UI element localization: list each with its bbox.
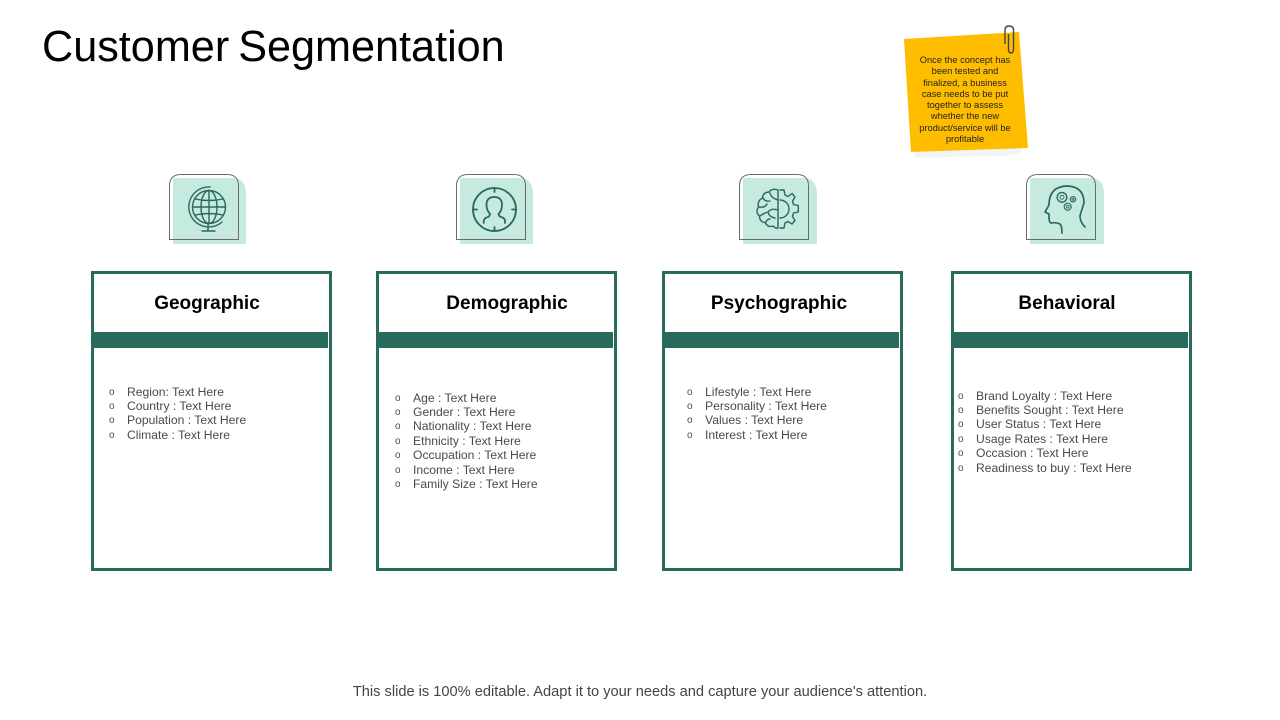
header band [379,332,613,348]
list: psychographic [687,385,827,442]
panel: psychographic [662,271,903,571]
heading: behavioral: Behavioral [1018,293,1116,314]
list: behavioral: o [958,391,964,402]
list: behavioral: Brand Loyalty : Text Here [976,389,1112,403]
note text [919,55,1011,144]
list: demographic [395,391,538,491]
list: demographic: o [395,479,401,490]
list: demographic: Gender : Text Here [413,405,515,419]
icon: paperclip [1004,25,1014,54]
list: psychographic: Personality : Text Here [705,399,827,413]
list: behavioral [958,389,1132,475]
list: demographic: Ethnicity : Text Here [413,434,521,448]
list: behavioral: o [958,419,964,430]
list: geographic: o [109,415,115,426]
list: behavioral: o [958,405,964,416]
icon tile: globe [169,174,246,244]
list: demographic: o [395,421,401,432]
panel: geographic [91,271,332,571]
note text: product/service will be [919,123,1011,133]
note text: case needs to be put [922,89,1008,99]
note text: Once the concept has [920,55,1010,65]
list: behavioral: Occasion : Text Here [976,446,1088,460]
note text: whether the new [931,111,999,121]
list: demographic: Occupation : Text Here [413,448,536,462]
sticky note [904,25,1028,158]
list: psychographic: Interest : Text Here [705,428,807,442]
list: geographic: o [109,430,115,441]
header band [94,332,328,348]
note text: profitable [946,134,984,144]
footer note: This slide is 100% editable. Adapt it to your needs and capture your audience's attention. [353,684,927,700]
list: behavioral: o [958,448,964,459]
list: geographic [109,385,246,442]
list: psychographic: o [687,415,693,426]
list: behavioral: o [958,434,964,445]
list: behavioral: User Status : Text Here [976,417,1101,431]
list: demographic: Family Size : Text Here [413,477,538,491]
panel: demographic [376,271,617,571]
icon tile: brain and gear [739,174,817,244]
list: demographic: Income : Text Here [413,463,515,477]
icon: head with gears [1045,186,1085,233]
title: Customer Segmentation [42,23,505,71]
list: demographic: o [395,450,401,461]
list: demographic: Nationality : Text Here [413,419,532,433]
header band [665,332,899,348]
list: demographic: o [395,407,401,418]
panel: behavioral [951,271,1192,571]
heading: demographic: Demographic [446,293,568,314]
list: demographic: Age : Text Here [413,391,496,405]
list: behavioral: o [958,463,964,474]
icon: person in target [473,188,516,231]
icon: globe [189,187,226,231]
icon tile: head with gears [1026,174,1104,244]
list: behavioral: Benefits Sought : Text Here [976,403,1124,417]
note text: finalized, a business [923,78,1007,88]
heading: geographic: Geographic [154,293,260,314]
list: geographic: o [109,401,115,412]
list: psychographic: Values : Text Here [705,413,803,427]
list: demographic: o [395,436,401,447]
icon tile: person target [456,174,533,244]
list: behavioral: Readiness to buy : Text Here [976,461,1132,475]
list: psychographic: Lifestyle : Text Here [705,385,811,399]
list: psychographic: o [687,430,693,441]
list: geographic: Country : Text Here [127,399,231,413]
list: psychographic: o [687,401,693,412]
note paper [904,32,1028,158]
list: demographic: o [395,393,401,404]
list: geographic: Population : Text Here [127,413,246,427]
header band [954,332,1188,348]
list: geographic: Region: Text Here [127,385,224,399]
note text: been tested and [932,66,998,76]
list: geographic: o [109,387,115,398]
note text: together to assess [927,100,1003,110]
list: behavioral: Usage Rates : Text Here [976,432,1108,446]
heading: psychographic: Psychographic [711,293,847,314]
icon: brain and gear [757,189,798,228]
list: psychographic: o [687,387,693,398]
list: geographic: Climate : Text Here [127,428,230,442]
list: demographic: o [395,465,401,476]
